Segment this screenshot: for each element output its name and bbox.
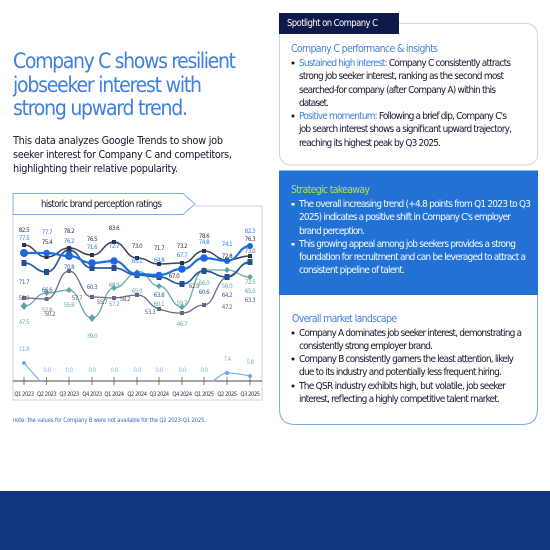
panel: chart bbox=[13, 194, 262, 400]
spotlight bullets: reaching its highest peak by Q3 2025. bbox=[299, 138, 441, 149]
data labels: 65.1 bbox=[132, 258, 143, 265]
data labels: 52.9 bbox=[19, 295, 30, 302]
data labels: 68.9 bbox=[109, 282, 120, 289]
landscape bullets: consistently strong employer brand. bbox=[299, 341, 433, 352]
intro text: highlighting their relative popularity. bbox=[13, 162, 178, 175]
landscape heading: Overall market landscape bbox=[292, 313, 397, 325]
data labels: 70.8 bbox=[64, 264, 75, 271]
data labels: 5.8 bbox=[246, 359, 255, 366]
panel: overall market landscape bbox=[280, 295, 538, 424]
spotlight bullets: searched-for company (after Company A) within this bbox=[299, 85, 496, 96]
takeaway bullets bbox=[292, 199, 531, 276]
landscape bullets: Company A dominates job seeker interest, demonstrating a bbox=[299, 328, 522, 339]
data labels: 60.6 bbox=[199, 289, 210, 296]
data labels: 74.1 bbox=[222, 241, 233, 248]
data labels: 72.7 bbox=[109, 243, 120, 250]
data labels: 71.7 bbox=[19, 279, 30, 286]
x axis bbox=[13, 377, 262, 398]
takeaway bullets: The overall increasing trend (+4.8 points from Q1 2023 to Q3 bbox=[298, 199, 531, 210]
data labels: 71.6 bbox=[87, 244, 98, 251]
data labels: 47.5 bbox=[19, 319, 30, 326]
landscape bullets: due to its industry and potentially less frequent hiring. bbox=[299, 367, 502, 378]
panel: spotlight on Company C bbox=[279, 13, 538, 165]
data labels: 78.6 bbox=[199, 233, 210, 240]
takeaway heading: Strategic takeaway bbox=[291, 184, 370, 196]
data labels: 64.8 bbox=[154, 257, 165, 264]
data labels: 77.5 bbox=[19, 235, 30, 242]
takeaway bullets: 2025) indicates a positive shift in Company C's employer bbox=[299, 212, 511, 223]
data labels: 52.8 bbox=[42, 307, 53, 314]
data labels: 56.0 bbox=[222, 283, 233, 290]
data labels: 76.3 bbox=[245, 236, 256, 243]
data labels: 0.0 bbox=[43, 367, 52, 374]
data labels: 63.8 bbox=[154, 292, 165, 299]
x axis: Q4 2024 bbox=[172, 392, 193, 398]
data labels: 76.5 bbox=[87, 236, 98, 243]
data labels: 82.5 bbox=[19, 227, 30, 234]
x axis: Q1 2025 bbox=[194, 392, 214, 398]
spotlight heading: Company C performance & insights bbox=[291, 43, 438, 55]
data labels: 0.0 bbox=[88, 367, 97, 374]
data labels: 59.7 bbox=[177, 300, 188, 307]
footer band bbox=[0, 491, 550, 550]
spotlight bullets: Positive momentum: Following a brief dip, Company C's bbox=[299, 111, 507, 122]
x axis: Q2 2024 bbox=[127, 392, 148, 398]
chart note: note: the values for Company B were not available for the Q2 2023-Q1 2025. bbox=[13, 418, 206, 424]
spotlight bullets: dataset. bbox=[299, 98, 329, 109]
data labels: 0.0 bbox=[133, 367, 142, 374]
data labels: 53.3 bbox=[145, 309, 156, 316]
chart title tag: historic brand perception ratings bbox=[41, 199, 162, 210]
spotlight header bbox=[279, 13, 399, 34]
data labels: 39.0 bbox=[87, 333, 98, 340]
data labels: 73.0 bbox=[245, 248, 256, 255]
spotlight bullets bbox=[292, 58, 512, 149]
data labels: 83.6 bbox=[109, 225, 120, 232]
spotlight bullets: job search interest shows a significant upward trajectory, bbox=[298, 124, 512, 135]
spotlight header: Spotlight on Company C bbox=[287, 18, 378, 29]
panel: strategic takeaway bbox=[279, 170, 538, 295]
x axis: Q3 2024 bbox=[149, 392, 170, 398]
data labels: 65.0 bbox=[245, 288, 256, 295]
data labels: 57.2 bbox=[109, 301, 119, 308]
data labels: 46.7 bbox=[177, 321, 188, 328]
data labels: 50.2 bbox=[45, 311, 55, 318]
data labels: 0.0 bbox=[178, 367, 187, 374]
data labels: 65.0 bbox=[132, 288, 143, 295]
data labels: 71.7 bbox=[154, 245, 165, 252]
data labels: 72.5 bbox=[245, 279, 256, 286]
takeaway bullets: consistent pipeline of talent. bbox=[299, 265, 405, 276]
series: mid blue bbox=[22, 247, 252, 287]
data labels: 64.2 bbox=[222, 292, 232, 299]
data labels bbox=[19, 225, 256, 374]
data labels: 0.0 bbox=[65, 367, 74, 374]
takeaway bullets: foundation for recruitment and can be leveraged to attract a bbox=[299, 252, 526, 263]
x axis: Q1 2024 bbox=[104, 392, 125, 398]
data labels: 55.7 bbox=[97, 299, 108, 306]
landscape bullets: The QSR industry exhibits high, but volatile, job seeker bbox=[298, 381, 506, 392]
takeaway bullets: This growing appeal among job seekers provides a strong bbox=[298, 239, 516, 250]
landscape bullets: Company B consistently garners the least attention, likely bbox=[299, 354, 515, 365]
title bbox=[12, 49, 236, 120]
x axis: Q3 2025 bbox=[240, 392, 260, 398]
data labels: 0.0 bbox=[200, 367, 209, 374]
data labels: 0.0 bbox=[110, 367, 119, 374]
landscape bullets: interest, reflecting a highly competitive talent market. bbox=[299, 394, 500, 405]
data labels: 72.8 bbox=[222, 253, 233, 260]
data labels: 77.7 bbox=[42, 229, 53, 236]
data labels: 78.2 bbox=[64, 228, 74, 235]
chart title tag bbox=[13, 194, 195, 214]
spotlight bullets: strong job seeker interest, ranking as the second most bbox=[299, 71, 504, 82]
series: gray bbox=[22, 261, 252, 315]
data labels: 82.3 bbox=[245, 228, 256, 235]
title: strong upward trend. bbox=[13, 96, 188, 120]
series: teal bbox=[20, 267, 253, 322]
data labels: 60.3 bbox=[87, 284, 98, 291]
data labels: 7.4 bbox=[223, 356, 232, 363]
data labels: 75.4 bbox=[42, 239, 53, 246]
series: Company C bbox=[20, 243, 253, 278]
series: dark bbox=[22, 240, 252, 266]
data labels: 0.0 bbox=[155, 367, 164, 374]
spotlight bullets: Sustained high interest: Company C consistently attracts bbox=[299, 58, 511, 69]
intro text: seeker interest for Company C and competitors, bbox=[13, 148, 232, 161]
landscape bullets bbox=[292, 328, 522, 405]
x axis: Q4 2023 bbox=[82, 392, 102, 398]
data labels: 73.2 bbox=[177, 243, 187, 250]
data labels: 60.1 bbox=[154, 301, 165, 308]
data labels: 62.9 bbox=[189, 283, 200, 290]
x axis: Q3 2023 bbox=[59, 392, 79, 398]
intro text bbox=[12, 134, 232, 175]
intro text: This data analyzes Google Trends to show job bbox=[12, 134, 223, 147]
data labels: 74.8 bbox=[199, 239, 210, 246]
data labels: 66.0 bbox=[199, 280, 210, 287]
data labels: 67.0 bbox=[169, 273, 180, 280]
x axis: Q1 2023 bbox=[14, 392, 34, 398]
data labels: 66.6 bbox=[42, 287, 53, 294]
title: Company C shows resilient bbox=[13, 49, 236, 73]
data labels: 58.2 bbox=[120, 296, 130, 303]
data labels: 67.7 bbox=[177, 252, 188, 259]
x axis: Q2 2025 bbox=[217, 392, 237, 398]
takeaway bullets: brand perception. bbox=[299, 226, 365, 237]
data labels: 55.6 bbox=[64, 302, 75, 309]
x axis: Q2 2023 bbox=[37, 392, 56, 398]
data labels: 73.0 bbox=[132, 243, 143, 250]
data labels: 63.3 bbox=[245, 297, 256, 304]
data labels: 57.7 bbox=[72, 295, 83, 302]
data labels: 47.2 bbox=[222, 304, 232, 311]
data labels: 76.2 bbox=[64, 238, 74, 245]
title: jobseeker interest with bbox=[12, 73, 202, 97]
series: Company B bbox=[22, 361, 252, 381]
data labels: 11.8 bbox=[19, 346, 30, 353]
